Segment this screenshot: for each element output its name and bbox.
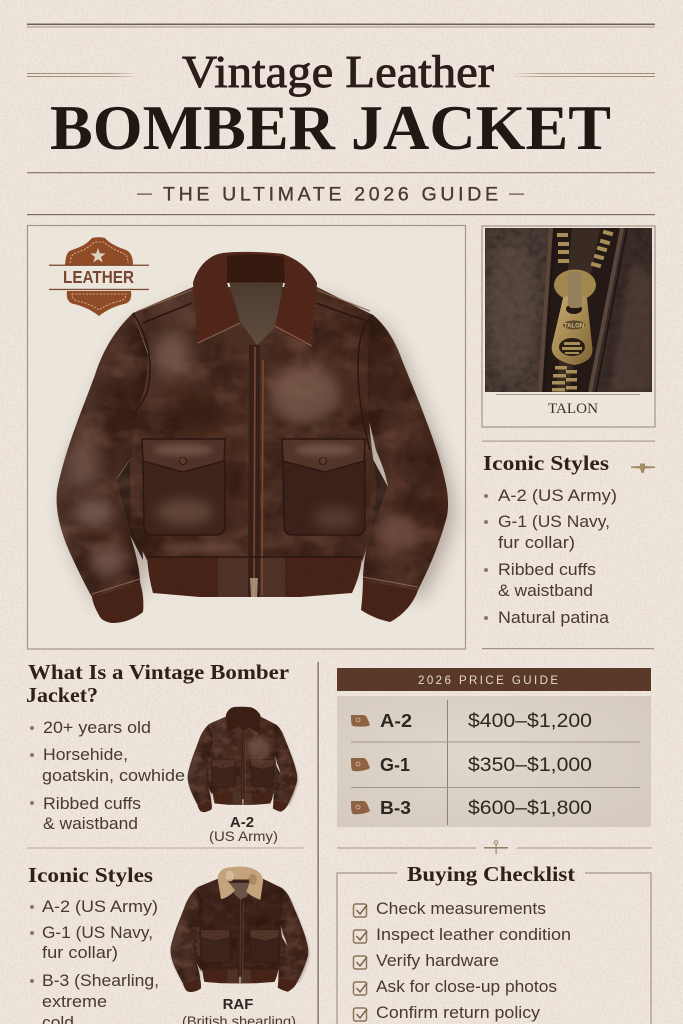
icon: plane (631, 464, 655, 473)
label: A-2: A-2 (230, 814, 254, 831)
subtitle: THE ULTIMATE 2026 GUIDE (163, 184, 498, 206)
banner (337, 668, 651, 691)
item: Verify hardware (376, 952, 499, 970)
rule below iconic styles (482, 648, 654, 649)
bullet list: Horsehide, (43, 746, 128, 764)
row G-1: G-1 (380, 755, 410, 775)
title: BOMBER JACKET (50, 92, 611, 163)
zipper teeth (552, 230, 613, 392)
heading: What Is a Vintage Bomber (28, 660, 289, 684)
heading: Buying Checklist (407, 862, 575, 886)
small jacket: A-2 (188, 707, 298, 812)
row A-2 (351, 711, 592, 732)
bullet list: fur collar) (42, 944, 118, 962)
title: Vintage Leather (182, 46, 494, 97)
zipper photo (485, 228, 652, 392)
bullet list: & waistband (498, 582, 593, 600)
item: Confirm return policy (376, 1004, 541, 1022)
bullet list (30, 898, 159, 1024)
panel: iconic styles right (483, 451, 655, 627)
rule under subtitle (27, 214, 655, 215)
jacket shadow (63, 295, 454, 605)
item: Check measurements (376, 900, 546, 918)
top double rule (27, 24, 655, 28)
bullet list (30, 719, 185, 833)
rule above iconic styles (482, 440, 655, 442)
ornament divider (337, 841, 652, 854)
badge: leather: LEATHER (63, 267, 134, 287)
label: A-2: (US Army) (209, 828, 278, 844)
divider between left panels (27, 848, 304, 849)
zipper pull (552, 270, 596, 365)
bullet list: goatskin, cowhide (42, 767, 185, 785)
bullet list: 20+ years old (43, 719, 151, 737)
bullet list: Natural patina (498, 609, 610, 627)
star (90, 248, 106, 262)
bullet list: B-3 (Shearling, (42, 972, 159, 990)
item: Inspect leather condition (376, 926, 571, 944)
bullet list: G-1 (US Navy, (42, 924, 153, 942)
lining (228, 278, 284, 345)
heading (26, 660, 289, 707)
heading: Iconic Styles (483, 451, 609, 475)
bullet list (484, 487, 617, 627)
zipper pull: TALON (564, 324, 584, 330)
panel: buying checklist (337, 862, 651, 1024)
panel: main jacket photo (28, 226, 466, 649)
panel: price guide (337, 668, 651, 827)
panel: iconic styles left (28, 863, 309, 1024)
item: Ask for close-up photos (376, 978, 557, 996)
rule under title (27, 172, 655, 173)
badge: leather (49, 237, 149, 316)
price table (337, 696, 651, 827)
row B-3 (351, 798, 592, 819)
panel: what is a vintage bomber jacket (26, 660, 298, 844)
row B-3: B-3 (380, 798, 411, 818)
label: RAF: RAF (223, 996, 253, 1013)
main jacket illustration (57, 252, 448, 623)
column divider (318, 662, 319, 1024)
bullet list: fur collar) (498, 534, 575, 552)
bullet list: Ribbed cuffs (498, 561, 596, 579)
banner: 2026 PRICE GUIDE (418, 675, 558, 687)
heading: Iconic Styles (28, 863, 153, 887)
title (27, 46, 655, 163)
bullet list: A-2 (US Army) (498, 487, 617, 505)
bullet list: Ribbed cuffs (43, 795, 141, 813)
caption: TALON (548, 401, 598, 417)
bullet list: G-1 (US Navy, (498, 513, 610, 531)
row A-2: A-2 (380, 711, 412, 731)
label: A-2 (209, 814, 278, 844)
bullet list: A-2 (US Army) (42, 898, 158, 916)
collar (193, 252, 317, 345)
row B-3: $600–$1,800 (468, 798, 592, 819)
heading: Jacket? (26, 683, 98, 707)
panel: zipper detail (482, 226, 655, 427)
row G-1 (351, 755, 592, 776)
bullet list: & waistband (43, 815, 138, 833)
bullet list: extreme (42, 993, 107, 1011)
seams (133, 303, 373, 557)
row G-1: $350–$1,000 (468, 755, 592, 776)
label: RAF (182, 996, 296, 1024)
small jacket: RAF (170, 867, 309, 992)
row A-2: $400–$1,200 (468, 711, 592, 732)
